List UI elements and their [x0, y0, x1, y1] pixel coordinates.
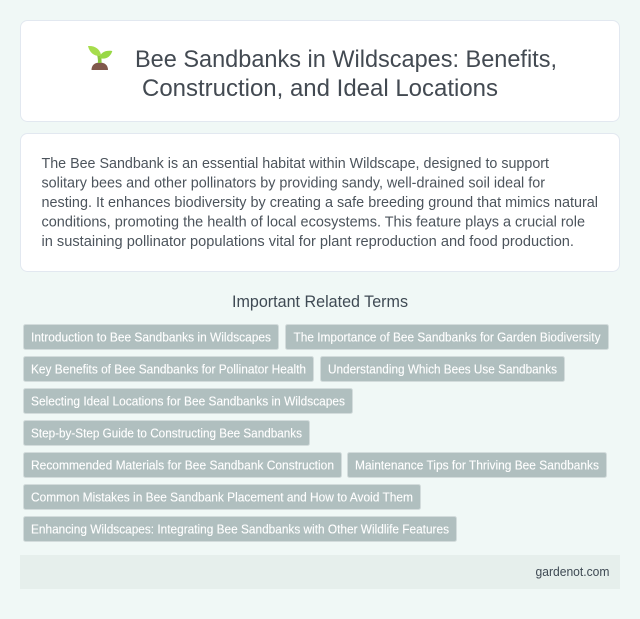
text block: description: nesting. It enhances biodiversity by creating a safe breeding ground that mimics natural	[42, 194, 598, 211]
text block: description: The Bee Sandbank is an essential habitat within Wildscape, designed to support	[42, 155, 550, 172]
chip: key benefits	[24, 356, 314, 382]
chip: introduction: Introduction to Bee Sandbanks in Wildscapes	[31, 330, 271, 344]
chip: importance: The Importance of Bee Sandbanks for Garden Biodiversity	[294, 330, 601, 344]
title: Bee Sandbanks in Wildscapes: Benefits,	[135, 46, 557, 73]
text block: description: conditions, promoting the health of local ecosystems. This feature plays a crucial role	[42, 214, 585, 230]
chip: which bees: Understanding Which Bees Use Sandbanks	[328, 362, 557, 376]
chip: ideal locations: Selecting Ideal Locations for Bee Sandbanks in Wildscapes	[31, 394, 345, 408]
panel: title card	[20, 20, 620, 122]
chip: step-by-step: Step-by-Step Guide to Constructing Bee Sandbanks	[31, 426, 302, 440]
chip: enhancing wildscapes	[24, 516, 456, 542]
chip: common mistakes: Common Mistakes in Bee Sandbank Placement and How to Avoid Them	[31, 490, 413, 504]
chip: which bees	[320, 356, 564, 382]
text block: description: solitary bees and other pollinators by providing sandy, well-drained soil ideal for	[42, 174, 545, 192]
chip: materials: Recommended Materials for Bee Sandbank Construction	[31, 458, 334, 472]
chip: ideal locations	[24, 388, 352, 414]
chip: introduction	[24, 324, 278, 350]
chip: maintenance: Maintenance Tips for Thriving Bee Sandbanks	[355, 458, 599, 472]
panel: related term chips	[24, 324, 608, 542]
heading: related terms: Important Related Terms	[232, 293, 408, 311]
chip: step-by-step	[24, 420, 310, 446]
chip: importance	[286, 324, 608, 350]
icon: seedling	[88, 46, 112, 70]
panel: description	[20, 134, 620, 272]
text block: description	[42, 155, 598, 250]
chip: maintenance	[348, 452, 606, 478]
chip: enhancing wildscapes: Enhancing Wildscapes: Integrating Bee Sandbanks with Other Wildlife Features	[31, 522, 449, 536]
chip: key benefits: Key Benefits of Bee Sandbanks for Pollinator Health	[31, 362, 306, 376]
title	[135, 46, 557, 102]
title: Construction, and Ideal Locations	[142, 75, 498, 102]
footer: gardenot.com	[536, 565, 610, 579]
text block: description: in sustaining pollinator populations vital for plant reproduction and food production.	[42, 233, 574, 250]
chip: materials	[24, 452, 342, 478]
footer	[20, 555, 620, 589]
chip: common mistakes	[24, 484, 420, 510]
